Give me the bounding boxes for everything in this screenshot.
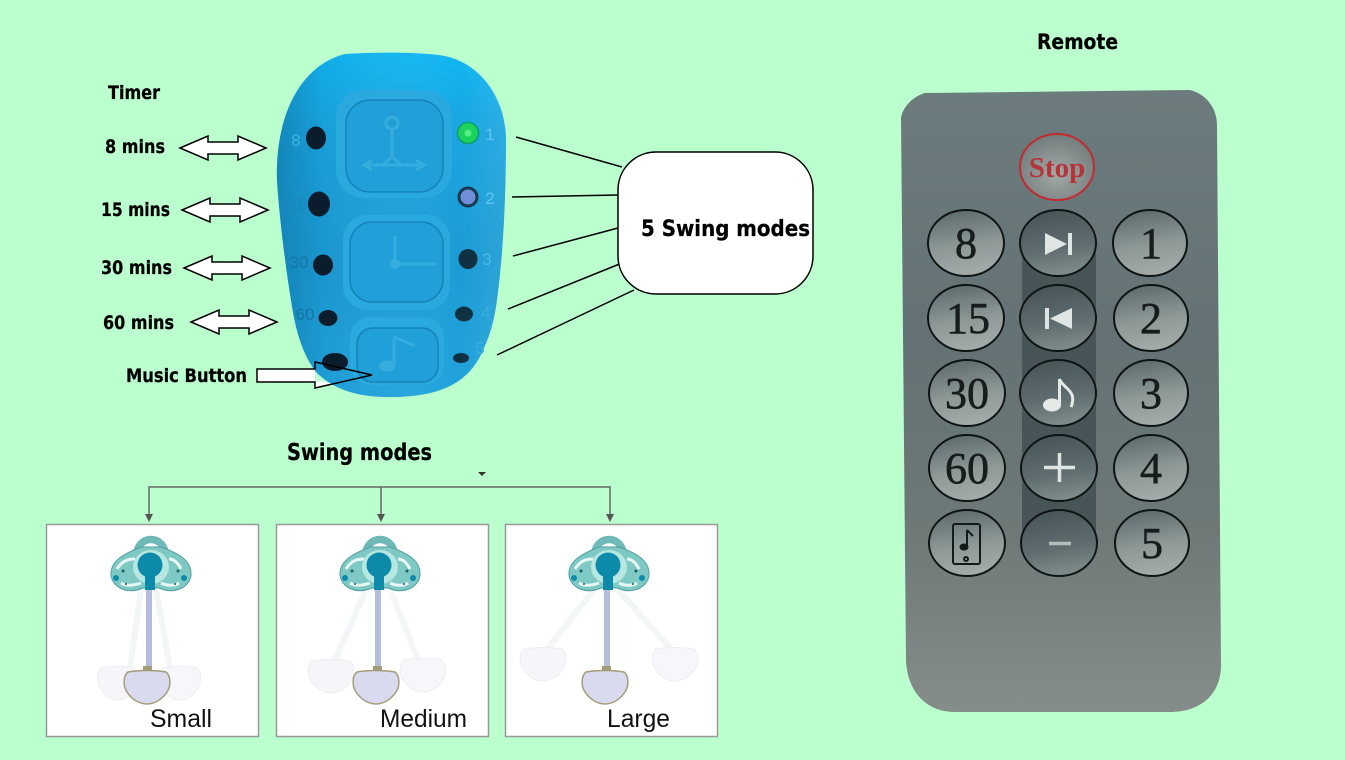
icon: minus — [1049, 542, 1071, 545]
label: Large: Large — [607, 705, 670, 733]
button: swing — [336, 90, 452, 198]
arrow: music button — [257, 362, 372, 388]
buttons: swing column — [1113, 210, 1189, 576]
icon: phone music — [953, 524, 980, 564]
buttons: timer column — [928, 210, 1005, 576]
button labels: 30 — [945, 369, 989, 418]
swing mode LEDs — [453, 122, 478, 363]
label: 60 mins: 60 mins — [103, 312, 174, 334]
faint printed numbers: 2 — [485, 189, 495, 208]
label: Music Button: Music Button — [126, 365, 247, 387]
heading: Timer: Timer — [108, 82, 161, 104]
label: 15 mins: 15 mins — [101, 199, 170, 221]
button labels: 3 — [1140, 369, 1162, 418]
faint printed numbers: 4 — [481, 303, 491, 322]
button: stop: Stop — [1029, 152, 1085, 184]
faint printed numbers: 8 — [291, 131, 301, 150]
pendulum: medium — [308, 536, 446, 704]
label: Medium: Medium — [380, 705, 467, 733]
button labels: 4 — [1140, 444, 1162, 493]
faint printed numbers: 5 — [475, 339, 485, 358]
device: blue swing controller — [277, 53, 506, 397]
button: stop — [1020, 134, 1094, 200]
faint printed numbers — [289, 125, 495, 358]
panel: large swing — [506, 524, 718, 736]
button labels: 60 — [945, 444, 989, 493]
callout: 5 Swing modes: 5 Swing modes — [641, 217, 810, 242]
timer holes — [306, 126, 348, 371]
button labels — [945, 219, 1163, 568]
label: Small: Small — [150, 705, 212, 733]
arrow: 30 mins — [184, 256, 270, 280]
button labels: 1 — [1140, 219, 1162, 268]
button labels: 15 — [946, 294, 990, 343]
faint printed numbers: 15 — [289, 195, 307, 214]
callout: 5 Swing modes — [618, 152, 813, 294]
arrow: 60 mins — [191, 310, 277, 334]
icon: previous — [1045, 308, 1072, 329]
icon: plus — [1044, 453, 1075, 482]
icon: next — [1045, 233, 1072, 255]
label: 8 mins: 8 mins — [105, 136, 165, 158]
remote control — [901, 90, 1221, 712]
arrow: 8 mins — [180, 136, 266, 160]
pendulum: small — [97, 536, 201, 704]
label: 30 mins: 30 mins — [101, 257, 172, 279]
panel: small swing — [46, 524, 258, 736]
heading: Remote: Remote — [1037, 30, 1118, 54]
heading: Swing modes: Swing modes — [287, 440, 432, 466]
faint printed numbers: 1 — [485, 125, 495, 144]
button labels: 2 — [1140, 294, 1162, 343]
panel: medium swing — [276, 524, 488, 736]
connector lines to callout — [497, 137, 634, 355]
arrow: 15 mins — [182, 198, 268, 222]
button labels: 8 — [955, 219, 977, 268]
buttons: control column — [1020, 210, 1097, 576]
faint printed numbers: 60 — [296, 305, 314, 324]
tree connector with arrows — [145, 472, 614, 522]
faint printed numbers: 30 — [290, 253, 308, 272]
button: music — [350, 317, 444, 385]
pendulum: large — [520, 536, 698, 704]
button: timer — [343, 215, 450, 310]
icon: music note — [1043, 379, 1073, 412]
button labels: 5 — [1141, 519, 1163, 568]
faint printed numbers: 3 — [482, 250, 492, 269]
